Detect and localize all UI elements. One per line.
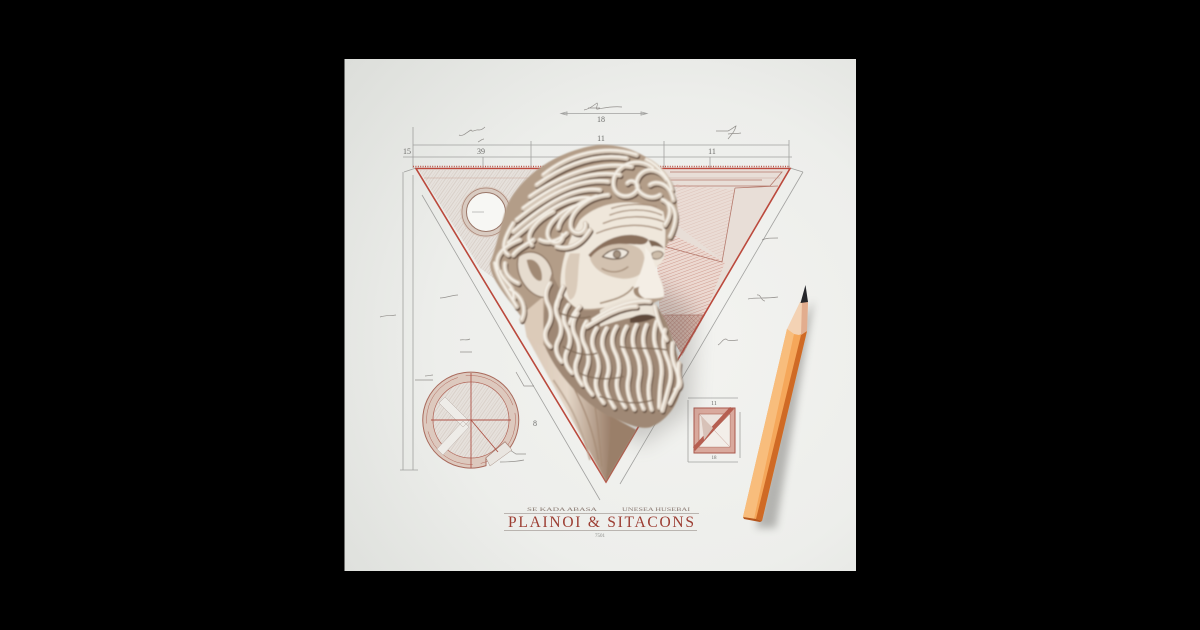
circular diagram [423, 372, 519, 468]
ring medallion [460, 186, 512, 238]
square diagram [693, 407, 735, 453]
paper sheet [344, 59, 856, 571]
dimension labels: 39 [477, 147, 485, 156]
drawing: dimension lines [400, 112, 803, 500]
head cast shadow [610, 280, 695, 445]
beard highlight layer [544, 283, 679, 410]
mustache [600, 298, 657, 327]
main title: PLAINOI & SITACONS [508, 514, 694, 531]
title block: 7501 [595, 534, 606, 539]
dimension labels [403, 115, 717, 461]
triangle: left hatched panel [419, 170, 540, 280]
triangle: red outline [416, 168, 790, 482]
forehead wrinkles [597, 204, 663, 233]
beard mid layer [545, 283, 680, 411]
small caption right: UNESEA HUSEBAI [622, 507, 690, 513]
pencil body [743, 329, 807, 521]
hair shadow layer [496, 152, 676, 322]
hair mid layer [495, 151, 675, 320]
neck light patch [523, 297, 543, 347]
marble head [490, 145, 682, 482]
hair highlight layer [495, 150, 675, 319]
head silhouette [490, 145, 682, 428]
dimension labels: 11 [597, 134, 605, 143]
dimension labels: 11 [708, 147, 716, 156]
cheek shadow [565, 253, 580, 300]
nose [634, 247, 664, 299]
beard cross curls [560, 313, 667, 403]
beard shadow layer [546, 285, 681, 412]
ear [517, 252, 553, 297]
small caption left: SE KADA ABASA [527, 507, 597, 513]
beard base [544, 273, 682, 428]
dimension labels: 18 [597, 115, 605, 124]
handwritten annotations [380, 103, 778, 462]
pencil shadow [756, 300, 814, 528]
neck [522, 310, 613, 482]
dimension labels: 15 [403, 147, 411, 156]
pencil [743, 285, 814, 528]
brow and eye [588, 235, 648, 263]
triangle: right hatched panel [650, 170, 788, 356]
pencil wood tip [787, 302, 808, 335]
face [561, 202, 665, 309]
mouth [630, 314, 656, 323]
dimension labels: 8 [533, 419, 537, 428]
pencil lead [800, 285, 808, 303]
title block [504, 507, 699, 539]
dimension labels: 18 [712, 456, 717, 461]
dimension labels: 11 [711, 401, 717, 407]
